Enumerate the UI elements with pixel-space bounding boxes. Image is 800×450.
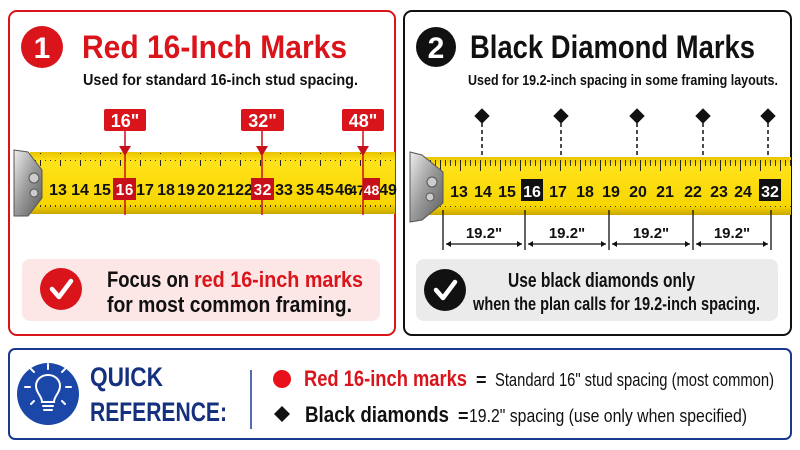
- tape measure: left: 45: [316, 182, 334, 199]
- legend: black diamonds: [274, 402, 747, 427]
- tape measure: left: 32: [254, 182, 272, 199]
- callout: 48": 48": [349, 111, 377, 131]
- icon: lightbulb: [17, 363, 79, 425]
- panel: quick reference: [9, 349, 791, 439]
- tip box: focus on red marks: for most common framing.: [107, 292, 352, 317]
- tape measure: left: 20: [197, 182, 215, 199]
- tape measure: right: 17: [549, 184, 567, 201]
- tape measure: right: 24: [734, 184, 752, 201]
- dimension lines: 19.2 inch: 19.2": [466, 225, 502, 242]
- tape measure: left: 49: [379, 182, 397, 199]
- callout: 32": 32": [248, 111, 277, 131]
- legend: red marks: =: [476, 370, 487, 390]
- tape measure: left: 46: [335, 182, 353, 199]
- heading: Black Diamond Marks: Black Diamond Marks: [470, 29, 755, 65]
- callout: 16": [104, 109, 146, 215]
- tape measure: left: 21: [217, 182, 235, 199]
- tape measure: right: 32: [761, 184, 779, 201]
- tip box: use black diamonds: Use black diamonds only: [508, 270, 696, 292]
- tape measure: right: 22: [684, 184, 702, 201]
- tape measure: left: [14, 150, 397, 216]
- tape measure: left: 48: [364, 182, 379, 198]
- tip box: use black diamonds: [416, 259, 778, 321]
- tape measure: left: 17: [136, 182, 154, 199]
- legend: black diamonds: Black diamonds: [305, 402, 449, 427]
- panel: red 16-inch marks: [9, 11, 397, 335]
- legend: red marks: [273, 366, 774, 391]
- tape measure: left: 47: [349, 182, 365, 198]
- tape measure: right: 16: [523, 184, 541, 201]
- tape measure: left: 19: [177, 182, 195, 199]
- icon: red check: [40, 268, 82, 310]
- callout: 48": [342, 109, 384, 215]
- legend: black diamonds: 19.2" spacing (use only when specified): [469, 406, 747, 426]
- callout: 16": 16": [111, 111, 139, 131]
- tip box: focus on red marks: Focus on: [107, 267, 189, 292]
- subtitle: Used for standard 16-inch stud spacing.: [83, 72, 358, 89]
- tape measure: left: 14: [71, 182, 89, 199]
- legend: black diamonds: =: [458, 406, 469, 426]
- heading: quick reference: QUICK: [90, 362, 163, 392]
- tape measure: right: 14: [474, 184, 492, 201]
- icon: black check: [424, 269, 466, 311]
- tape measure: right: 13: [450, 184, 468, 201]
- dimension lines: 19.2 inch: [443, 210, 771, 250]
- panel: quick reference: REFERENCE:: [90, 397, 227, 427]
- icon: number 1: 1: [34, 32, 50, 65]
- tape measure: right: 20: [629, 184, 647, 201]
- tape measure: left: 33: [275, 182, 293, 199]
- tape measure: right: 21: [656, 184, 674, 201]
- panel: black diamond marks: [404, 11, 791, 335]
- tape measure: left: 15: [93, 182, 111, 199]
- tape measure: left: 16: [116, 182, 134, 199]
- tape measure: right: 15: [498, 184, 516, 201]
- diamonds with dashed lines: [475, 109, 775, 170]
- callout: 32": [241, 109, 284, 215]
- tape measure: left: 18: [157, 182, 175, 199]
- dimension lines: 19.2 inch: 19.2": [714, 225, 750, 242]
- tape measure: right: 19: [602, 184, 620, 201]
- tip box: focus on red marks: [22, 259, 380, 321]
- heading: Red 16-Inch Marks: Red 16-Inch Marks: [82, 29, 347, 65]
- dimension lines: 19.2 inch: 19.2": [549, 225, 585, 242]
- tape measure: left: 22: [235, 182, 253, 199]
- tape measure: right: [410, 152, 791, 222]
- tape measure: right: 23: [710, 184, 728, 201]
- legend: red marks: Red 16-inch marks: [304, 366, 467, 391]
- icon: number 1: [21, 26, 63, 68]
- icon: number 2: 2: [428, 32, 444, 65]
- dimension lines: 19.2 inch: 19.2": [633, 225, 669, 242]
- tape measure: left: 13: [49, 182, 67, 199]
- tape measure: left: 35: [296, 182, 314, 199]
- tip box: focus on red marks: red 16-inch marks: [194, 267, 363, 292]
- tape measure: right: 18: [576, 184, 594, 201]
- icon: number 2: [416, 27, 456, 67]
